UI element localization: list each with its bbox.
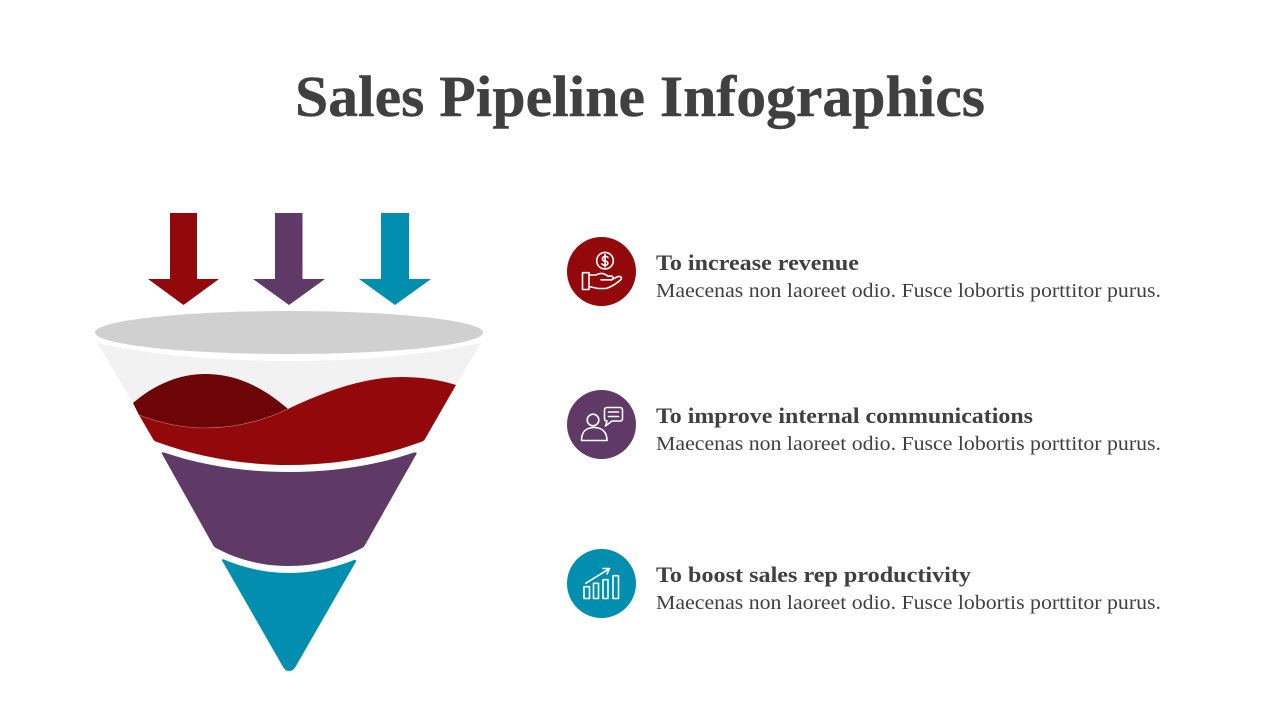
item 2: improve communications: [567, 390, 1161, 459]
description: Maecenas non laoreet odio. Fusce lobortis porttitor purus.: [656, 433, 1161, 455]
funnel top light band: [97, 343, 481, 441]
arrow: red: [148, 213, 219, 305]
description: Maecenas non laoreet odio. Fusce lobortis porttitor purus.: [656, 280, 1161, 302]
arrow: purple: [253, 213, 325, 305]
item 3: boost productivity: [567, 549, 1161, 618]
item 1: increase revenue: [567, 237, 1161, 306]
funnel opening ellipse: [95, 311, 483, 354]
purple funnel segment: [162, 452, 417, 566]
icon: rising bar chart: [567, 549, 636, 618]
teal funnel tip: [222, 559, 356, 671]
arrow: teal: [359, 213, 431, 305]
red funnel segment: [139, 377, 456, 465]
heading: To increase revenue: [656, 250, 859, 275]
icon: person with speech bubble: [567, 390, 636, 459]
icon: hand holding coin: [567, 237, 636, 306]
heading: To improve internal communications: [656, 403, 1033, 428]
funnel diagram: [95, 213, 483, 671]
seam line between dark wave and red segment: [139, 409, 288, 428]
title: Sales Pipeline Infographics: [295, 64, 985, 129]
description: Maecenas non laoreet odio. Fusce lobortis porttitor purus.: [656, 592, 1161, 614]
dark red wave: [133, 374, 288, 428]
heading: To boost sales rep productivity: [656, 562, 971, 587]
